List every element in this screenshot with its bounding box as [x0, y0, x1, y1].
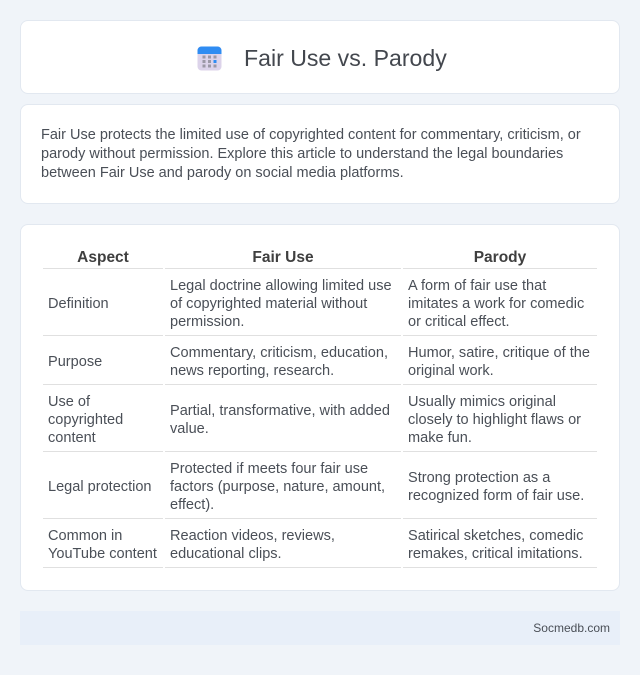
- row: common in YouTube content: educational clips.: [170, 546, 282, 562]
- row: definition: imitates a work for comedic: [408, 296, 584, 312]
- row: legal protection: factors (purpose, nature, amount,: [170, 479, 385, 495]
- text block: intro: [41, 127, 581, 181]
- row: common in YouTube content: Reaction videos, reviews,: [170, 528, 335, 544]
- row: use of copyrighted content: copyrighted: [48, 412, 123, 428]
- row: definition: A form of fair use that: [408, 278, 546, 294]
- row: common in YouTube content: [48, 528, 583, 562]
- row: purpose: Purpose: [48, 354, 102, 370]
- row: legal protection: effect).: [170, 497, 214, 513]
- table header: Parody: [474, 249, 526, 266]
- row: use of copyrighted content: Use of: [48, 394, 90, 410]
- text block: intro: parody without permission. Explore this article to understand the legal boundaries: [41, 146, 563, 162]
- row: purpose: Commentary, criticism, education,: [170, 345, 388, 361]
- panel: comparison table: [20, 224, 620, 591]
- row: purpose: original work.: [408, 363, 494, 379]
- table header: [77, 249, 526, 266]
- row: use of copyrighted content: value.: [170, 421, 209, 437]
- row: definition: Definition: [48, 296, 109, 312]
- row: use of copyrighted content: make fun.: [408, 430, 472, 446]
- footer bar: [20, 611, 620, 645]
- text block: intro: between Fair Use and parody on social media platforms.: [41, 165, 404, 181]
- row: common in YouTube content: Common in: [48, 528, 122, 544]
- panel: introduction: [20, 104, 620, 204]
- icon: calendar: [198, 46, 222, 70]
- row: use of copyrighted content: Partial, transformative, with added: [170, 403, 390, 419]
- row: legal protection: recognized form of fair use.: [408, 488, 584, 504]
- text block: intro: Fair Use protects the limited use of copyrighted content for commentary, criticism, or: [41, 127, 581, 143]
- table header: Aspect: [77, 249, 129, 266]
- row: use of copyrighted content: [48, 394, 581, 446]
- row: legal protection: Legal protection: [48, 479, 152, 495]
- footer text: Socmedb.com: [533, 621, 610, 635]
- row: use of copyrighted content: content: [48, 430, 96, 446]
- table header: Fair Use: [252, 249, 314, 266]
- row: common in YouTube content: YouTube content: [48, 546, 157, 562]
- panel: title card: [20, 20, 620, 94]
- row: purpose: Humor, satire, critique of the: [408, 345, 590, 361]
- row: definition: [48, 278, 584, 330]
- row: definition: permission.: [170, 314, 244, 330]
- row: purpose: [48, 345, 590, 379]
- row: use of copyrighted content: Usually mimics original: [408, 394, 556, 410]
- row: common in YouTube content: remakes, critical imitations.: [408, 546, 583, 562]
- row: use of copyrighted content: closely to highlight flaws or: [408, 412, 581, 428]
- row: purpose: news reporting, research.: [170, 363, 334, 379]
- row: definition: or critical effect.: [408, 314, 510, 330]
- row: definition: Legal doctrine allowing limited use: [170, 278, 392, 294]
- row: definition: of copyrighted material without: [170, 296, 367, 312]
- row: legal protection: Protected if meets four fair use: [170, 461, 368, 477]
- row: common in YouTube content: Satirical sketches, comedic: [408, 528, 583, 544]
- row: legal protection: Strong protection as a: [408, 470, 550, 486]
- row: legal protection: [48, 461, 584, 513]
- title: Fair Use vs. Parody: [244, 45, 447, 71]
